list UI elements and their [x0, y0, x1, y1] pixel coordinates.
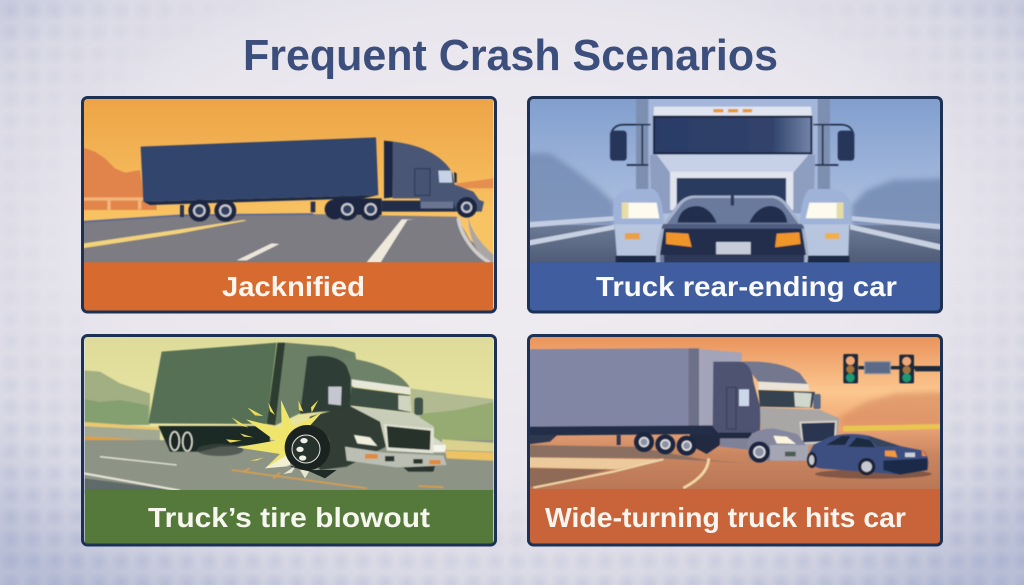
icon: explosion burst [226, 400, 337, 478]
illustration: jackknifed truck on highway [80, 95, 500, 313]
icon: blown tire [285, 425, 330, 470]
title: Frequent Crash Scenarios [243, 31, 778, 80]
banner: wide-turning truck [530, 489, 940, 544]
icon: traffic lights [843, 354, 947, 383]
panel: tire blowout [80, 332, 500, 545]
panel border [528, 98, 942, 312]
banner: jackknifed [84, 262, 493, 313]
banner: truck rear-ending car [530, 262, 941, 313]
car rear [656, 192, 808, 265]
label: Truck's tire blowout: Truck’s tire blowout [148, 502, 430, 533]
panel border [528, 336, 942, 545]
truck [523, 348, 839, 463]
panel: jackknifed [80, 95, 500, 313]
illustration: truck tire blowout [80, 332, 500, 544]
hazy hills [840, 392, 947, 427]
hazy trees [523, 153, 947, 227]
car [807, 434, 932, 479]
truck [141, 137, 484, 222]
panel border [82, 98, 496, 312]
label: Jacknified: Jacknified [222, 271, 365, 302]
label: Wide-turning truck hits car: Wide-turning truck hits car [545, 502, 906, 533]
panel border [82, 336, 496, 545]
truck front [610, 93, 854, 265]
panel: truck rear-ending car [523, 93, 947, 313]
label: Truck rear-ending car: Truck rear-ending car [596, 271, 897, 302]
illustration: truck behind car [523, 93, 947, 313]
truck [148, 343, 447, 472]
panel: wide-turning truck [523, 332, 947, 545]
illustration: wide-turning truck hits car [523, 332, 947, 544]
banner: tire blowout [85, 490, 493, 544]
